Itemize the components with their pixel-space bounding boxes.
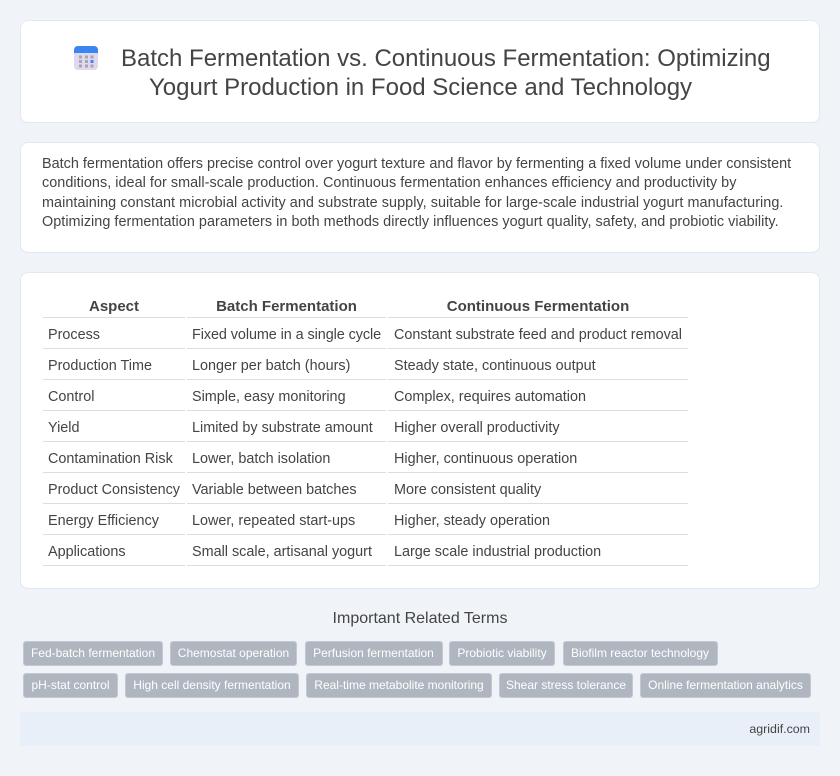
intro text: maintaining constant microbial activity and substrate supply, suitable for large-scale industrial yogurt manufacturing. — [42, 195, 784, 211]
comparison table: Continuous Fermentation — [447, 298, 629, 315]
footer site name: agridif.com — [749, 722, 810, 736]
related term chips: Biofilm reactor technology — [571, 646, 709, 660]
comparison table: Longer per batch (hours) — [192, 358, 350, 374]
comparison table: Higher, continuous operation — [394, 451, 577, 467]
title — [121, 45, 771, 101]
related term chips — [23, 641, 811, 698]
related term chips: Fed-batch fermentation — [31, 646, 155, 660]
intro text — [42, 156, 792, 230]
header card — [20, 20, 820, 123]
related term chips: Online fermentation analytics — [648, 678, 803, 692]
comparison table: Fixed volume in a single cycle — [192, 327, 381, 343]
comparison table: Lower, batch isolation — [192, 451, 330, 467]
comparison table: Higher, steady operation — [394, 513, 550, 529]
related term chips: Perfusion fermentation — [313, 646, 434, 660]
comparison table: Lower, repeated start-ups — [192, 513, 355, 529]
comparison table: Complex, requires automation — [394, 389, 586, 405]
related term chips: Real-time metabolite monitoring — [314, 678, 484, 692]
footer bar — [20, 712, 820, 746]
title: Batch Fermentation vs. Continuous Fermentation: Optimizing — [121, 45, 771, 72]
title: Yogurt Production in Food Science and Technology — [149, 74, 692, 101]
comparison table: Simple, easy monitoring — [192, 389, 346, 405]
comparison table: Aspect — [89, 298, 139, 315]
intro panel — [20, 142, 820, 253]
related term chips: Chemostat operation — [178, 646, 289, 660]
intro text: Batch fermentation offers precise control over yogurt texture and flavor by fermenting a fixed volume under consistent — [42, 156, 791, 172]
related term chips: Probiotic viability — [457, 646, 547, 660]
icon: calendar — [74, 46, 98, 70]
comparison table: Higher overall productivity — [394, 420, 560, 436]
comparison table: Small scale, artisanal yogurt — [192, 544, 372, 560]
comparison table: Yield — [48, 420, 79, 436]
comparison table: Contamination Risk — [48, 451, 173, 467]
comparison table: Constant substrate feed and product removal — [394, 327, 682, 343]
comparison table: Limited by substrate amount — [192, 420, 373, 436]
comparison table: Variable between batches — [192, 482, 357, 498]
comparison table: Product Consistency — [48, 482, 180, 498]
related term chips: Shear stress tolerance — [506, 678, 626, 692]
related term chips: pH-stat control — [31, 678, 110, 692]
related term chips: High cell density fermentation — [133, 678, 291, 692]
comparison table: Control — [48, 389, 94, 405]
comparison table: Process — [48, 327, 100, 343]
comparison table: Large scale industrial production — [394, 544, 601, 560]
comparison table: More consistent quality — [394, 482, 541, 498]
comparison table: Steady state, continuous output — [394, 358, 596, 374]
comparison table — [43, 298, 688, 566]
table panel — [20, 272, 820, 589]
related terms heading: Important Related Terms — [333, 610, 507, 627]
comparison table: Batch Fermentation — [216, 298, 357, 315]
comparison table: Energy Efficiency — [48, 513, 159, 529]
intro text: Optimizing fermentation parameters in both methods directly influences yogurt quality, safety, and probiotic viability. — [42, 214, 779, 230]
comparison table: Production Time — [48, 358, 152, 374]
intro text: conditions, ideal for small-scale production. Continuous fermentation enhances efficiency and productivity by — [42, 175, 736, 191]
comparison table: Applications — [48, 544, 126, 560]
